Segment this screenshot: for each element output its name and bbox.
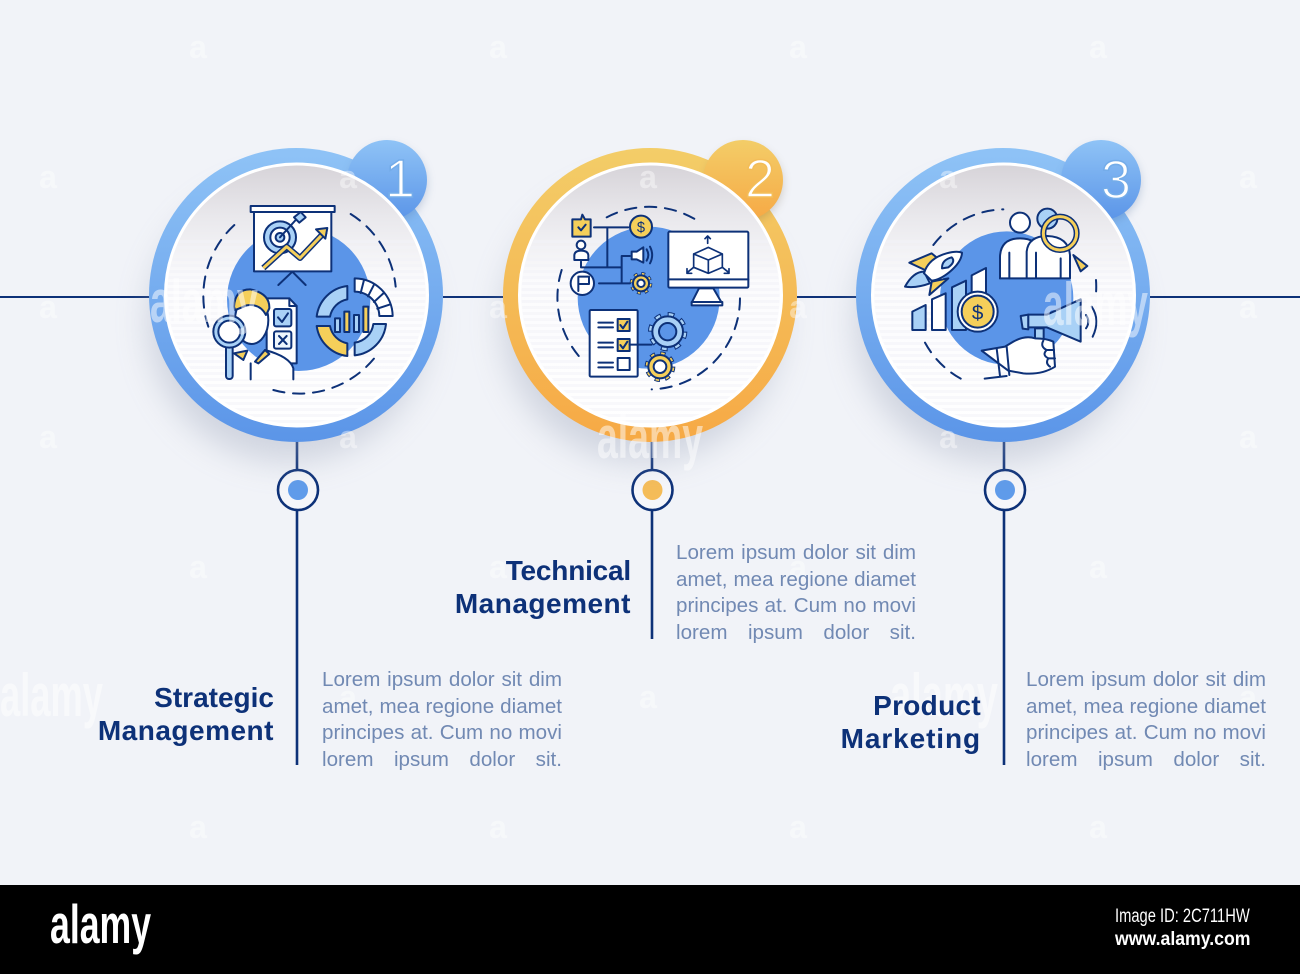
small watermarks: a: [489, 549, 507, 585]
small watermarks: a: [39, 159, 57, 195]
text block: technical management: principes at. Cum no movi: [676, 594, 916, 617]
small watermarks: a: [1239, 679, 1257, 715]
step 3 circle: [855, 140, 1150, 462]
badge 3: [1061, 140, 1141, 220]
small watermarks: a: [1089, 549, 1107, 585]
text block: strategic management: amet, mea regione diamet: [322, 695, 562, 718]
horizontal timeline line: [0, 296, 1300, 298]
small watermarks: a: [789, 289, 807, 325]
rocket: [905, 252, 962, 295]
text block: technical management: lorem ipsum dolor sit.: [676, 621, 916, 644]
megaphone: [1021, 299, 1096, 343]
badge 2: [703, 140, 783, 220]
small person: [574, 241, 588, 260]
small watermarks: a: [1089, 29, 1107, 65]
heading: strategic management: [98, 682, 274, 746]
icon: technical management: [557, 207, 748, 389]
heading: product marketing: Product: [873, 690, 981, 721]
small watermarks: a: [639, 159, 657, 195]
large watermarks: alamy: [150, 268, 258, 335]
heading: strategic management: Management: [98, 714, 274, 746]
text block: product marketing: lorem ipsum dolor sit.: [1026, 748, 1266, 771]
small watermarks: a: [939, 159, 957, 195]
text block: technical management: amet, mea regione diamet: [676, 568, 916, 591]
small watermarks: a: [1239, 289, 1257, 325]
step 1 connector with node: [278, 440, 318, 765]
document with checkboxes: [267, 298, 297, 363]
small watermarks: a: [189, 809, 207, 845]
badge 1: 1: [385, 149, 415, 209]
dollar coin: [630, 216, 652, 238]
person with magnifier: [213, 289, 293, 379]
step 1 circle: [148, 140, 443, 462]
speaker: [632, 247, 652, 263]
dollar coin: [958, 292, 998, 332]
heading: technical management: Management: [455, 588, 631, 618]
small watermarks: a: [39, 289, 57, 325]
small watermarks: a: [1089, 809, 1107, 845]
small watermarks: a: [339, 679, 357, 715]
text block: strategic management: principes at. Cum no movi: [322, 721, 562, 744]
small gear: [631, 274, 651, 293]
small watermarks: a: [1239, 419, 1257, 455]
text block: technical management: Lorem ipsum dolor sit dim: [676, 541, 916, 564]
text block: strategic management: lorem ipsum dolor sit.: [322, 748, 562, 771]
hand: [982, 337, 1055, 379]
heading: product marketing: [841, 690, 981, 754]
small watermarks: a: [339, 419, 357, 455]
heading: technical management: Technical: [506, 555, 631, 586]
small watermarks: a: [189, 29, 207, 65]
footer image id and url: Image ID: 2C711HW: [1115, 906, 1250, 927]
large watermarks: alamy: [0, 662, 103, 729]
footer image id and url: [1115, 906, 1251, 950]
small watermarks: a: [789, 809, 807, 845]
small watermarks: a: [39, 419, 57, 455]
small watermarks: [39, 29, 1257, 845]
org connectors: [581, 227, 630, 283]
heading: technical management: [455, 555, 631, 619]
small watermarks: a: [189, 549, 207, 585]
dollar coin: $: [637, 220, 645, 236]
small watermarks: a: [489, 29, 507, 65]
small watermarks: a: [789, 29, 807, 65]
footer logo: alamy: [50, 893, 151, 955]
growth bars: [912, 268, 986, 330]
badge 2: 2: [745, 149, 775, 209]
shopping bag: [572, 215, 591, 237]
small watermarks: a: [1239, 159, 1257, 195]
badge 1: [347, 140, 427, 220]
footer band: [0, 885, 1300, 974]
dollar coin: $: [972, 301, 984, 324]
monitor: [668, 232, 748, 305]
small watermarks: a: [939, 419, 957, 455]
small watermarks: a: [489, 809, 507, 845]
text block: product marketing: amet, mea regione diamet: [1026, 695, 1266, 718]
icon: product marketing: [905, 209, 1096, 382]
presentation board: [251, 206, 335, 285]
donut chart with bars: [317, 278, 393, 356]
yellow gear: [647, 354, 673, 379]
heading: product marketing: Marketing: [841, 722, 981, 754]
large watermarks: alamy: [890, 662, 998, 729]
large watermarks: alamy: [597, 404, 703, 471]
step 3 connector with node: [985, 440, 1025, 765]
small watermarks: a: [339, 159, 357, 195]
step 2 circle: [502, 140, 797, 462]
checklist: [590, 310, 652, 377]
text block: strategic management: [322, 668, 562, 771]
large gear: [651, 315, 684, 348]
heading: strategic management: Strategic: [154, 682, 274, 713]
step 2 connector with node: [632, 440, 672, 639]
large watermarks: alamy: [1043, 271, 1148, 338]
two people with magnifier: [1000, 209, 1087, 278]
icon: strategic management: [203, 206, 396, 394]
footer image id and url: www.alamy.com: [1115, 929, 1251, 950]
small watermarks: a: [789, 549, 807, 585]
text block: product marketing: [1026, 668, 1266, 771]
badge 3: 3: [1101, 150, 1131, 210]
large watermarks: [0, 268, 1148, 729]
small watermarks: a: [639, 679, 657, 715]
text block: technical management: [676, 541, 916, 644]
flag: [571, 272, 594, 295]
text block: product marketing: Lorem ipsum dolor sit dim: [1026, 668, 1266, 691]
text block: strategic management: Lorem ipsum dolor sit dim: [322, 668, 562, 691]
small watermarks: a: [489, 289, 507, 325]
text block: product marketing: principes at. Cum no movi: [1026, 721, 1266, 744]
